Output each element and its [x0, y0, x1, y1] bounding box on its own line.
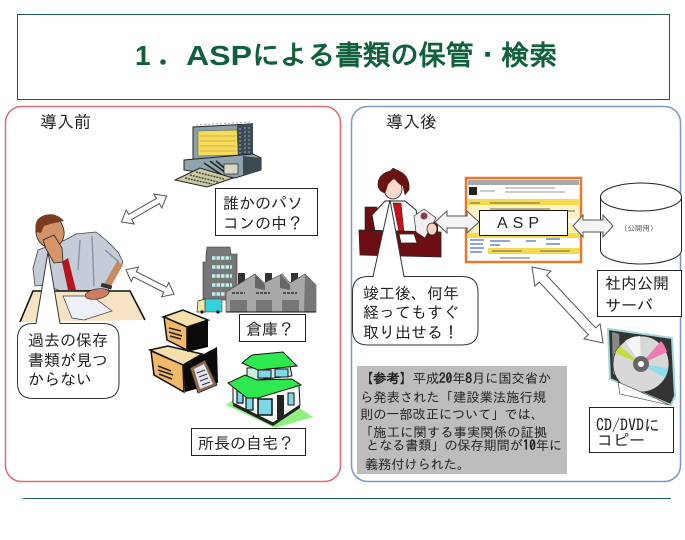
callout: internal public server: 社内公開 [605, 275, 669, 291]
screenshot: ASP web screen [466, 178, 581, 262]
callout: documents not found [18, 252, 119, 398]
note: reference text [357, 366, 567, 474]
callout: retrievable any time: 竣工後、何年 [363, 285, 459, 301]
ASP label box [480, 210, 568, 236]
icon: server cylinder [600, 183, 682, 264]
callout: documents not found: 過去の保存 [28, 332, 108, 348]
note: reference text: となる書類」の保存期間が10年に [366, 438, 562, 452]
panel: after introduction [352, 106, 682, 482]
icon: troubled man at desk [20, 213, 145, 322]
icon: CD case [608, 329, 675, 405]
title text: による書類の保管・検索 [252, 41, 557, 69]
callout: director's home: 所長の自宅？ [198, 435, 294, 451]
icon: stacked boxes [150, 310, 218, 393]
arrow: ASP to server [573, 215, 613, 237]
callout: someone's PC: 誰かのパソ [223, 195, 303, 211]
icon: computer [175, 122, 261, 187]
arrow: man to ASP [435, 211, 479, 233]
title text: 1 [135, 40, 151, 71]
arrow: person to warehouse [122, 263, 178, 301]
title text: ASP [186, 40, 252, 71]
callout: retrievable any time: 取り出せる！ [363, 324, 459, 340]
arrow: person to computer [117, 189, 171, 229]
callout: someone's PC [216, 188, 318, 236]
callout: retrievable any time [352, 200, 478, 345]
icon: office building and warehouse [197, 247, 316, 314]
note: reference text: 「施工に関する事実関係の証拠 [360, 425, 547, 439]
callout: someone's PC: コンの中？ [223, 215, 303, 231]
before heading: 導入前 [40, 113, 91, 131]
note: reference text: 義務付けられた。 [365, 457, 470, 471]
note: reference text: ら発表された「建設業法施行規 [360, 390, 546, 404]
note: reference text: 【参考】平成20年8月に国交省か [360, 371, 551, 385]
callout: director's home [192, 428, 306, 456]
title text [135, 40, 557, 71]
callout: warehouse [240, 314, 306, 342]
callout: internal public server: サーバ [605, 297, 653, 313]
title box [18, 14, 670, 100]
callout: copy to CD/DVD: CD/DVDに [596, 417, 660, 433]
callout: internal public server [598, 270, 682, 316]
callout: copy to CD/DVD [590, 408, 674, 452]
note: reference text: 則の一部改正について」では、 [360, 407, 544, 421]
icon: server cylinder: （公開用） [620, 224, 658, 233]
ASP label box: ASP [497, 215, 544, 232]
after heading: 導入後 [386, 113, 437, 131]
panel: before introduction [6, 106, 340, 482]
callout: retrievable any time: 経ってもすぐ [363, 303, 459, 320]
callout: warehouse: 倉庫？ [246, 321, 294, 337]
icon: house [226, 352, 313, 428]
arrow: ASP to CD [524, 259, 611, 351]
callout: copy to CD/DVD: コピー [597, 432, 645, 448]
callout: documents not found: 書類が見つ [28, 352, 108, 368]
icon: man holding document [359, 168, 441, 257]
callout: documents not found: からない [28, 371, 92, 387]
